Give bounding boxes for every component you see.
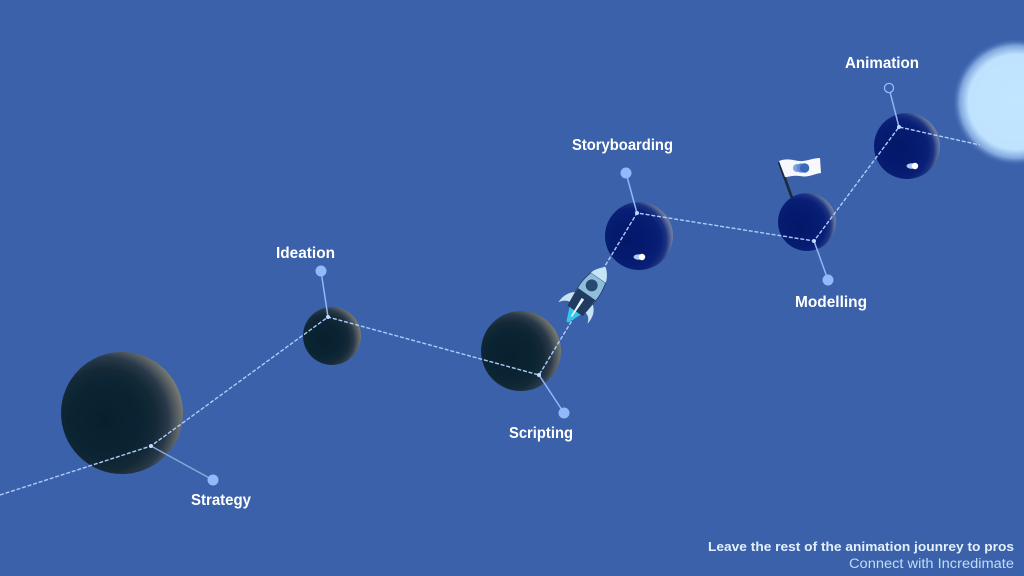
caption headline: Leave the rest of the animation jounrey to pros — [708, 539, 1014, 554]
label: Animation: Animation — [845, 55, 919, 72]
left fin — [558, 287, 577, 308]
right fin — [580, 303, 599, 324]
label: Storyboarding: Storyboarding — [572, 137, 673, 154]
planet highlight: Storyboarding — [634, 254, 645, 260]
dashed journey path — [0, 127, 980, 495]
planet: Storyboarding — [605, 202, 673, 270]
icon: flag — [779, 158, 821, 198]
marker: Modelling — [822, 274, 834, 286]
marker: Storyboarding — [620, 168, 632, 178]
label: Scripting: Scripting — [509, 425, 573, 442]
marker: Scripting — [558, 408, 570, 418]
body — [566, 271, 608, 317]
exhaust streak — [570, 298, 584, 317]
label: Strategy: Strategy — [191, 492, 251, 509]
connector lines — [151, 88, 899, 480]
icon: rocket — [552, 256, 620, 332]
planet: Strategy — [61, 352, 183, 474]
caption — [708, 539, 1014, 571]
planet: Modelling — [778, 193, 836, 251]
marker: Animation (hollow) — [884, 83, 894, 93]
exhaust flame — [562, 307, 581, 326]
node dots on path — [149, 125, 901, 448]
marker: Ideation — [316, 266, 326, 276]
planet: Ideation — [303, 307, 361, 365]
window — [583, 277, 600, 294]
nose — [591, 262, 613, 283]
label: Modelling: Modelling — [795, 294, 867, 311]
sun — [952, 38, 1024, 166]
label: Ideation: Ideation — [276, 245, 335, 262]
caption subline: Connect with Incredimate — [849, 556, 1014, 571]
marker: Strategy — [208, 474, 218, 486]
planet highlight: Animation — [906, 163, 918, 169]
lower body — [567, 288, 595, 317]
planet: Animation — [874, 113, 940, 179]
planet: Scripting — [481, 311, 561, 391]
